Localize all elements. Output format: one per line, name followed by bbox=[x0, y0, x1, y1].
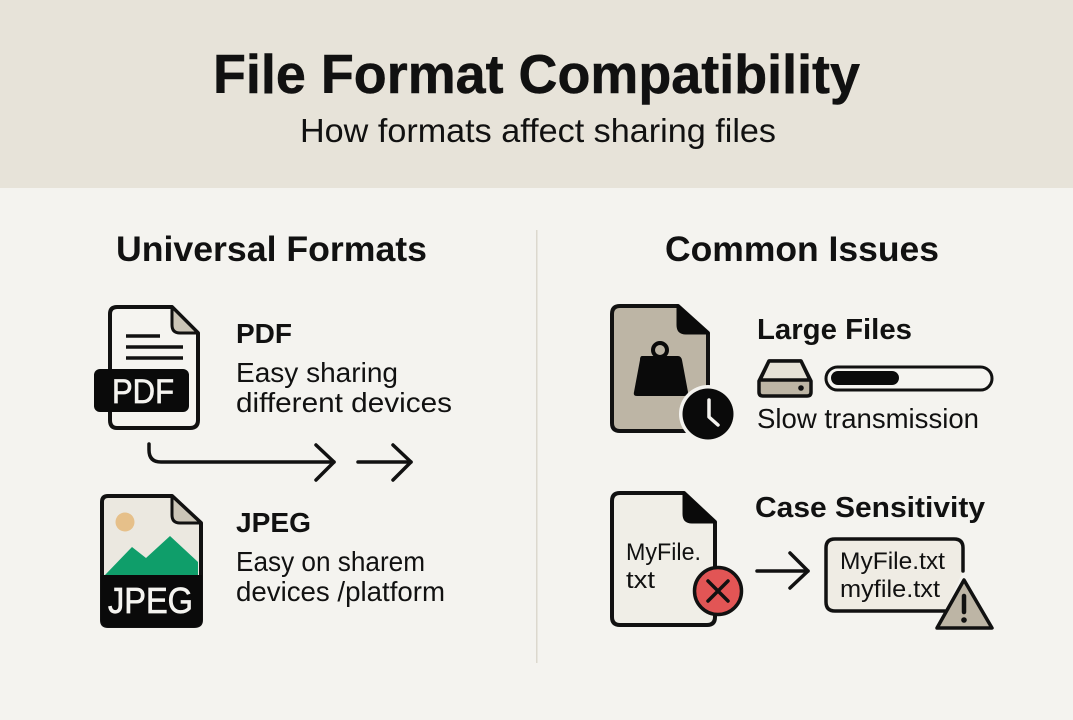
text: JPEG description: devices /platform bbox=[236, 576, 445, 607]
heading: universal formats: Universal Formats bbox=[116, 230, 427, 269]
icon: warning triangle bbox=[937, 580, 992, 628]
text: PDF description: Easy sharing bbox=[236, 357, 398, 388]
text: JPEG description: Easy on sharem bbox=[236, 546, 425, 577]
icon: PDF file: PDF bbox=[112, 373, 174, 411]
panel: common issues bbox=[612, 230, 992, 628]
arrow: to file names bbox=[757, 553, 808, 588]
subtitle: How formats affect sharing files bbox=[300, 112, 776, 149]
title: File Format Compatibility bbox=[213, 43, 860, 105]
icon: hard drive bbox=[759, 361, 811, 396]
arrows: PDF to JPEG bbox=[149, 444, 411, 480]
icon: file with error: txt bbox=[626, 567, 655, 594]
text: PDF description: different devices bbox=[236, 387, 452, 418]
icon: file with error bbox=[612, 493, 742, 625]
panel: universal formats bbox=[94, 230, 452, 627]
icon: file with error: MyFile. bbox=[626, 539, 701, 566]
heading: common issues: Common Issues bbox=[665, 230, 939, 269]
text: JPEG description: JPEG bbox=[236, 507, 311, 538]
icon: heavy file with clock bbox=[612, 306, 737, 443]
icon: JPEG file: JPEG bbox=[108, 580, 193, 621]
text: slow transmission: Slow transmission bbox=[757, 403, 979, 434]
icon: PDF file bbox=[94, 307, 198, 428]
header band bbox=[0, 0, 1073, 188]
file name box with warning bbox=[826, 539, 992, 628]
text: PDF description: PDF bbox=[236, 318, 292, 349]
progress bar bbox=[826, 367, 992, 390]
text: PDF description bbox=[236, 318, 452, 418]
text: large files heading: Large Files bbox=[757, 314, 912, 346]
file name box with warning: myfile.txt bbox=[840, 576, 940, 603]
icon: JPEG file bbox=[101, 496, 202, 627]
text: case sensitivity heading: Case Sensitivity bbox=[755, 492, 985, 524]
text: JPEG description bbox=[236, 507, 445, 607]
file name box with warning: MyFile.txt bbox=[840, 548, 945, 575]
